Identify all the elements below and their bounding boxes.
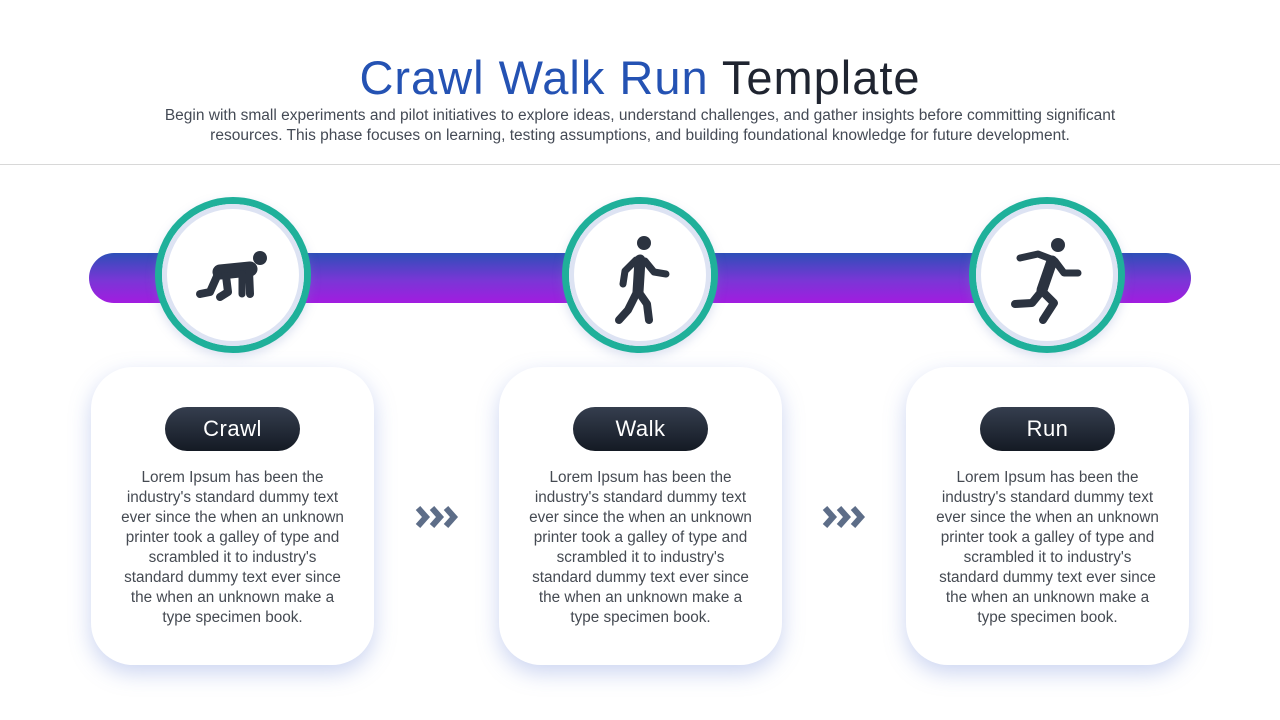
subtitle: Begin with small experiments and pilot initiatives to explore ideas, understand challenges, and gather insights before committing significant	[165, 107, 1115, 124]
label: run	[980, 407, 1115, 451]
title: Crawl Walk Run Template	[359, 51, 921, 104]
label: walk	[573, 407, 708, 451]
subtitle	[165, 107, 1116, 144]
text: walk: Lorem Ipsum has been the	[550, 469, 731, 486]
text: crawl: scrambled it to industry's	[149, 549, 316, 566]
text: walk: ever since the when an unknown	[529, 509, 752, 526]
text: walk: industry's standard dummy text	[535, 489, 746, 506]
text: walk: printer took a galley of type and	[534, 529, 747, 546]
subtitle: resources. This phase focuses on learning, testing assumptions, and building foundational knowledge for future development.	[210, 127, 1070, 144]
card: walk	[499, 367, 782, 665]
label: walk: Walk	[615, 416, 666, 441]
icon: run	[969, 197, 1125, 353]
text: crawl: printer took a galley of type and	[126, 529, 339, 546]
text: crawl: the when an unknown make a	[131, 589, 334, 606]
text: crawl: type specimen book.	[162, 609, 303, 626]
text: walk: scrambled it to industry's	[557, 549, 724, 566]
text: walk: the when an unknown make a	[539, 589, 742, 606]
text: run	[936, 469, 1159, 626]
label: crawl: Crawl	[203, 416, 262, 441]
text: run: standard dummy text ever since	[939, 569, 1156, 586]
label: crawl	[165, 407, 300, 451]
card: run	[906, 367, 1189, 665]
text: run: Lorem Ipsum has been the	[956, 469, 1138, 486]
label: run: Run	[1027, 416, 1068, 441]
card: crawl	[91, 367, 374, 665]
text: walk: type specimen book.	[570, 609, 711, 626]
arrow: chevrons 2	[822, 506, 865, 528]
text: crawl	[121, 469, 344, 626]
text: run: industry's standard dummy text	[942, 489, 1153, 506]
text: crawl: industry's standard dummy text	[127, 489, 338, 506]
timeline bar	[89, 253, 1191, 303]
text: run: scrambled it to industry's	[964, 549, 1131, 566]
text: crawl: ever since the when an unknown	[121, 509, 344, 526]
text: crawl: standard dummy text ever since	[124, 569, 341, 586]
text: run: type specimen book.	[977, 609, 1118, 626]
text: run: printer took a galley of type and	[941, 529, 1154, 546]
text: run: the when an unknown make a	[946, 589, 1149, 606]
text: walk	[529, 469, 752, 626]
arrow: chevrons 1	[416, 506, 458, 528]
text: walk: standard dummy text ever since	[532, 569, 749, 586]
text: run: ever since the when an unknown	[936, 509, 1159, 526]
icon: crawl	[155, 197, 311, 353]
text: crawl: Lorem Ipsum has been the	[142, 469, 323, 486]
icon: walk	[562, 197, 718, 353]
